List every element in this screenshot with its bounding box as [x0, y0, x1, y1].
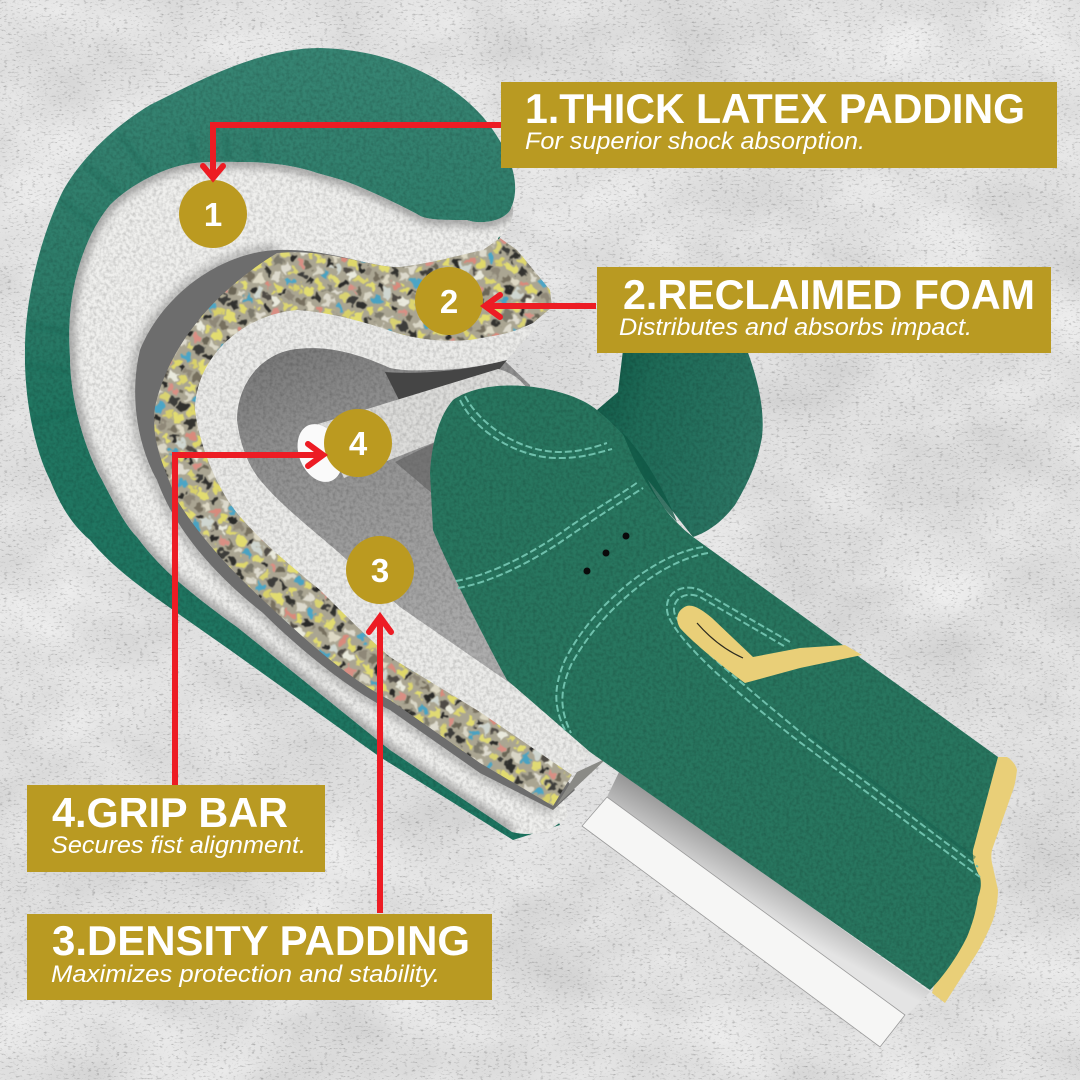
arrow: grip bar: [175, 444, 323, 786]
marker circle 2: 2: [440, 283, 458, 320]
slit line: [697, 623, 743, 658]
label: thick latex padding: 1.THICK LATEX PADDING: [525, 85, 1025, 132]
arrow: latex padding: [203, 125, 502, 178]
label: reclaimed foam: Distributes and absorbs impact.: [619, 314, 972, 341]
reclaimed foam confetti layer: [154, 238, 572, 806]
outer green leather shell: [25, 48, 560, 840]
label: grip bar: [27, 785, 325, 872]
arrow: density padding: [369, 617, 391, 913]
thumb slit trim: [677, 606, 862, 683]
shadow beside bar: [395, 440, 440, 500]
yellow cuff trim: [932, 757, 1017, 1003]
grip bar: [318, 369, 528, 478]
air vent holes: [584, 532, 630, 574]
marker circle 1: 1: [204, 196, 222, 233]
marker circle 2: [415, 267, 483, 335]
white lining strip: [582, 797, 905, 1047]
thumb of glove: [597, 350, 763, 537]
fold shadow: [622, 432, 677, 522]
marker circle 4: 4: [349, 425, 368, 462]
latex inner edge shading: [69, 162, 513, 832]
marker circle 3: [346, 536, 414, 604]
label: thick latex padding: [501, 82, 1057, 168]
main glove body: [430, 386, 998, 990]
label: density padding: 3.DENSITY PADDING: [52, 917, 470, 964]
stitching: [456, 396, 980, 877]
shell fold streaks: [26, 135, 258, 420]
label: reclaimed foam: 2.RECLAIMED FOAM: [623, 271, 1035, 318]
grey under-strip beneath cuff: [607, 770, 930, 1017]
grip bar end cap: [289, 417, 351, 489]
dark wedge above bar: [385, 360, 507, 402]
dark grey inner layer: [135, 250, 575, 810]
label: density padding: Maximizes protection and stability.: [51, 961, 440, 988]
label: density padding: [27, 914, 492, 1000]
marker circle 1: [179, 180, 247, 248]
marker circle 4: [324, 409, 392, 477]
crease along cuff stitching: [810, 735, 975, 858]
arrow: reclaimed foam: [485, 295, 596, 317]
grey layer shadow: [135, 250, 553, 810]
textured foam end: [556, 758, 607, 806]
marker circle 3: 3: [371, 552, 389, 589]
label: grip bar: Secures fist alignment.: [51, 832, 306, 859]
density padding layer: [195, 310, 592, 775]
label: reclaimed foam: [597, 267, 1051, 353]
thick latex padding layer: [69, 162, 568, 834]
label: thick latex padding: For superior shock absorption.: [525, 128, 865, 155]
felt cavity: [215, 330, 530, 715]
label: grip bar: 4.GRIP BAR: [52, 789, 288, 836]
